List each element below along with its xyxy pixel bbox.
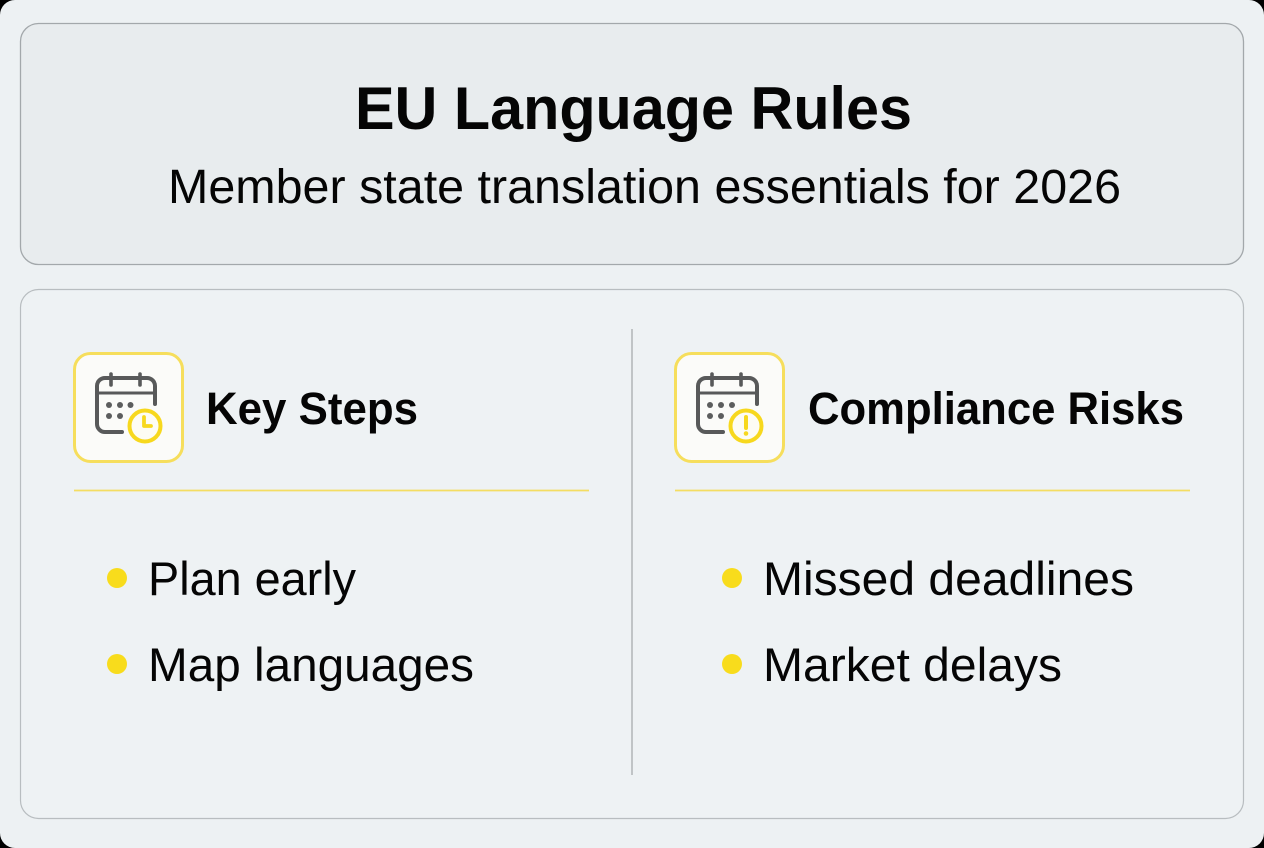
bullet: map languages: Map languages	[148, 638, 474, 691]
panel: content	[20, 290, 1244, 818]
icon: calendar with clock	[74, 354, 182, 462]
title: EU Language Rules	[355, 75, 912, 142]
panel: header	[20, 24, 1244, 264]
column: compliance risks	[675, 354, 1190, 691]
heading: compliance risks: Compliance Risks	[808, 383, 1184, 434]
bullet: plan early: Plan early	[148, 552, 356, 605]
subtitle: Member state translation essentials for 2026	[168, 161, 1121, 214]
icon: calendar with warning	[676, 354, 784, 462]
heading: key steps: Key Steps	[206, 383, 418, 434]
column: key steps	[74, 354, 589, 691]
bullet: market delays: Market delays	[763, 638, 1062, 691]
bullet: missed deadlines: Missed deadlines	[763, 552, 1134, 605]
